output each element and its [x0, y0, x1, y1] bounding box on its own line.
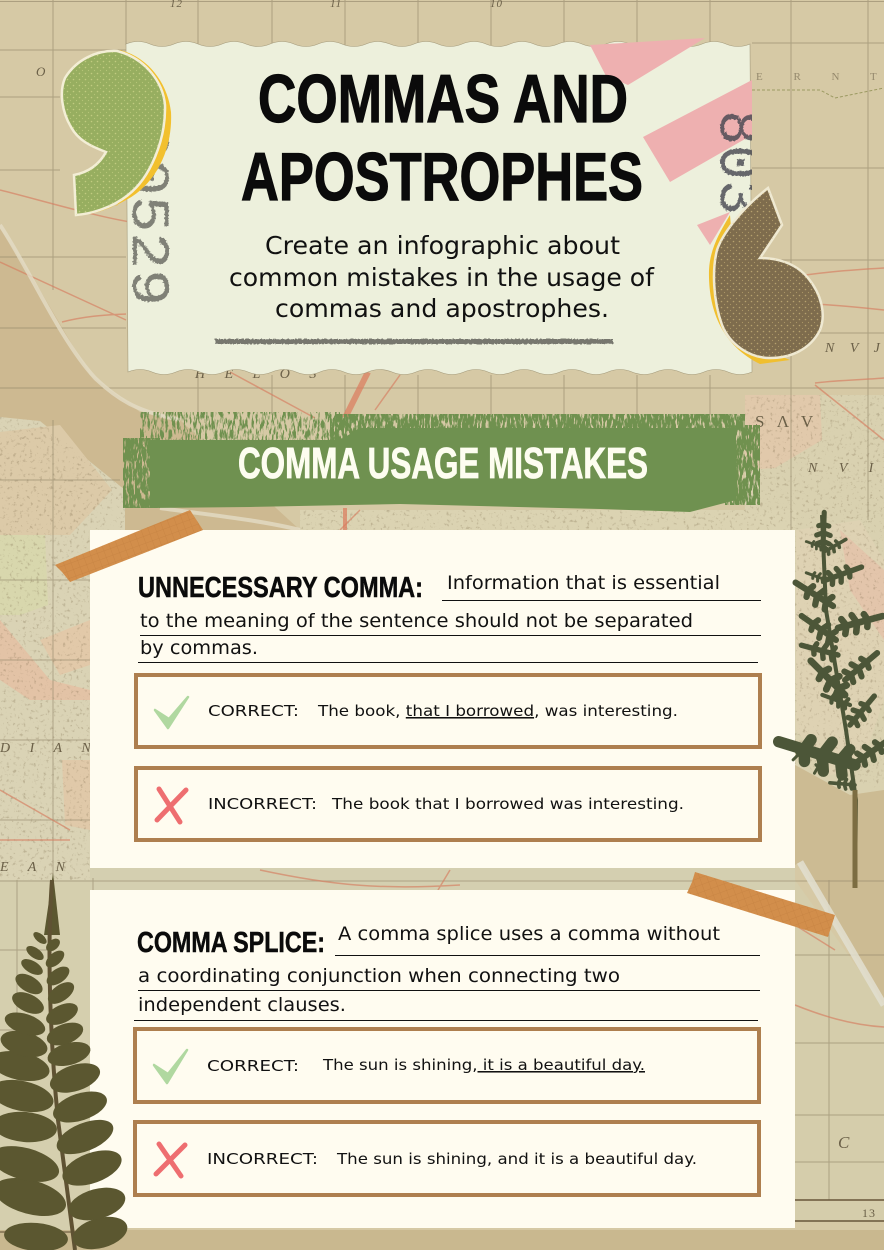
icon: pressed plant right [774, 512, 884, 888]
map lettering: S Λ V [755, 412, 817, 431]
map lettering: O [36, 64, 53, 79]
subtitle [229, 231, 655, 323]
map colour blotches right [745, 395, 884, 775]
tan paper lower right [795, 765, 884, 1005]
incorrect example box [135, 1122, 759, 1195]
correct example box: CORRECT: [207, 1057, 299, 1075]
banner dry brush left edge [123, 438, 160, 508]
icon: brown apostrophe [709, 188, 823, 364]
map strip below header [300, 510, 796, 530]
heading: unnecessary comma: UNNECESSARY COMMA: [138, 572, 423, 604]
banner dry brush top left [140, 412, 340, 445]
subtitle: Create an infographic about [265, 231, 620, 260]
banner dry brush right edge [725, 425, 760, 505]
icon: cross mark [156, 1144, 185, 1176]
definition text [134, 923, 760, 1020]
correct example box: CORRECT: [208, 702, 299, 720]
title [241, 61, 643, 215]
torn paper title card [116, 38, 768, 374]
icon: cross mark [157, 789, 186, 822]
map colour blotches left [0, 425, 112, 830]
section banner: comma usage mistakes [123, 412, 760, 512]
map strip between panels [90, 868, 795, 890]
map lettering: C [838, 1133, 857, 1152]
icon: green comma [62, 50, 171, 216]
icon: check mark [154, 1050, 187, 1083]
heading: comma splice: COMMA SPLICE: [137, 927, 325, 959]
map region right [745, 395, 884, 795]
map lettering: D I A N [0, 741, 99, 756]
stamped divider line [215, 339, 613, 344]
map lower right [795, 880, 884, 1222]
map region left [0, 417, 125, 880]
incorrect example box: INCORRECT: [207, 1150, 318, 1168]
washi tape top left [55, 510, 203, 582]
icon: check mark [155, 697, 188, 728]
pink paper strips [590, 38, 752, 245]
stamped number right: 803 [703, 110, 768, 215]
definition text: to the meaning of the sentence should not be separated [140, 610, 693, 632]
correct example box: The book, that I borrowed , was interesting. [317, 702, 678, 720]
incorrect example box: INCORRECT: [208, 795, 317, 813]
map lettering: H E L O S [194, 367, 324, 382]
map lettering: 13 [862, 1206, 876, 1220]
title: APOSTROPHES [241, 139, 643, 215]
definition text: a coordinating conjunction when connecting two [138, 965, 620, 987]
title: COMMAS AND [258, 61, 628, 137]
map lower left [0, 880, 90, 1232]
definition text [138, 572, 761, 662]
map lettering: E A N [0, 860, 73, 875]
definition text: by commas. [140, 637, 258, 659]
correct example box [135, 1029, 759, 1102]
definition text: Information that is essential [447, 572, 720, 594]
incorrect example box [136, 768, 760, 840]
stamped serial number: 80529 [116, 122, 177, 306]
subtitle: commas and apostrophes. [275, 294, 609, 323]
incorrect example box: The sun is shining, and it is a beautiful day. [336, 1150, 697, 1168]
panel: comma splice [90, 890, 795, 1228]
definition text: A comma splice uses a comma without [338, 923, 720, 945]
icon: pressed fern bottom left [0, 873, 131, 1250]
section banner: comma usage mistakes: COMMA USAGE MISTAKES [238, 439, 648, 488]
incorrect example box: The book that I borrowed was interesting. [331, 795, 684, 813]
torn tan paper band [0, 228, 300, 530]
subtitle: common mistakes in the usage of [229, 263, 655, 292]
correct example box [136, 675, 760, 747]
panel: unnecessary comma [90, 530, 795, 868]
map lettering: N V I [807, 461, 882, 476]
correct example box: The sun is shining, it is a beautiful day. [322, 1056, 645, 1074]
map print noise [0, 395, 884, 880]
banner dry brush top right [330, 414, 745, 445]
definition text: independent clauses. [138, 994, 346, 1016]
bottom tan strip [0, 1230, 884, 1250]
banner solid paint [150, 428, 736, 512]
washi tape right [687, 872, 835, 937]
